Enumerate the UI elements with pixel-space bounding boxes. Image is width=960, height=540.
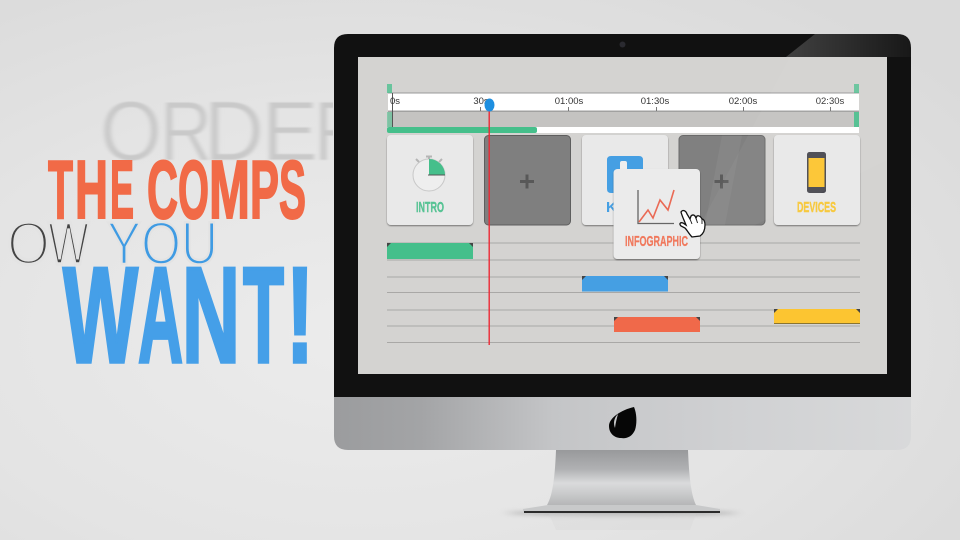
time labels: 02:00s [729,96,758,107]
headline text [11,102,333,364]
word: ORDER: O [100,84,162,178]
icon: line chart [638,190,674,224]
time labels: 0s [390,96,400,107]
track lines [387,243,860,342]
word: WANT!: ! [286,239,314,391]
label: K: K [606,199,617,216]
red playhead [484,98,494,345]
range handles [387,84,392,93]
black bezel [334,34,911,397]
clip bar: green [387,243,473,259]
headline text: S [279,143,306,236]
silver chin [334,396,911,450]
word: ORDER: R [160,84,212,178]
word: ORDER: E [262,84,318,178]
word: WANT!: A [138,239,183,391]
monitor stand [507,450,737,530]
card: devices [774,135,860,225]
timeline ruler [387,84,859,133]
word: ORDER: R [314,84,368,178]
card: key [582,135,668,225]
card: intro [387,135,473,225]
time labels: 01:30s [641,96,670,107]
work area bar [388,127,859,133]
word: THE COMPS: T [48,143,73,236]
word: WANT!: N [182,239,240,391]
screen glass reflection [703,220,706,226]
camera [620,42,626,48]
label: devices: DEVICES [797,199,836,216]
time labels: 02:30s [816,96,845,107]
word: HOW: O [7,210,50,277]
time labels: 30s [473,96,489,107]
icon: stopwatch [413,156,445,191]
plus icon [714,174,728,188]
monitor body [334,34,911,450]
word: WANT!: T [243,239,284,391]
word: ORDER: D [204,84,264,178]
time labels: 01:00s [555,96,584,107]
word: THE COMPS: H [75,143,108,236]
word: THE COMPS: M [209,143,250,236]
icon: phone [807,152,826,193]
word: THE COMPS: P [250,143,279,236]
label: infographic: INFOGRAPHIC [625,233,688,250]
time labels [390,98,844,104]
word: WANT!: W [63,239,138,391]
icon: blue tile [607,156,643,193]
glass reflection on bezel [786,34,911,57]
word: ORDER [103,102,333,160]
word: THE COMPS: E [110,143,134,236]
word: THE COMPS: O [178,143,209,236]
word: YOU: YOU [107,210,218,277]
logo drop [609,407,636,438]
word: THE COMPS: C [147,143,178,236]
card: empty slot 1 [484,136,570,225]
word: HOW [11,224,88,263]
word: HOW: W [48,210,89,277]
icon: hand cursor [680,211,705,237]
card: empty slot 2 [679,136,765,225]
screen [358,57,887,374]
clip bar: yellow [774,309,860,324]
card: infographic (dragged) [614,169,700,259]
label: intro: INTRO [416,199,444,216]
plus icon [520,174,534,188]
clip bar: orange [614,317,700,332]
clip bar: blue [582,276,668,292]
